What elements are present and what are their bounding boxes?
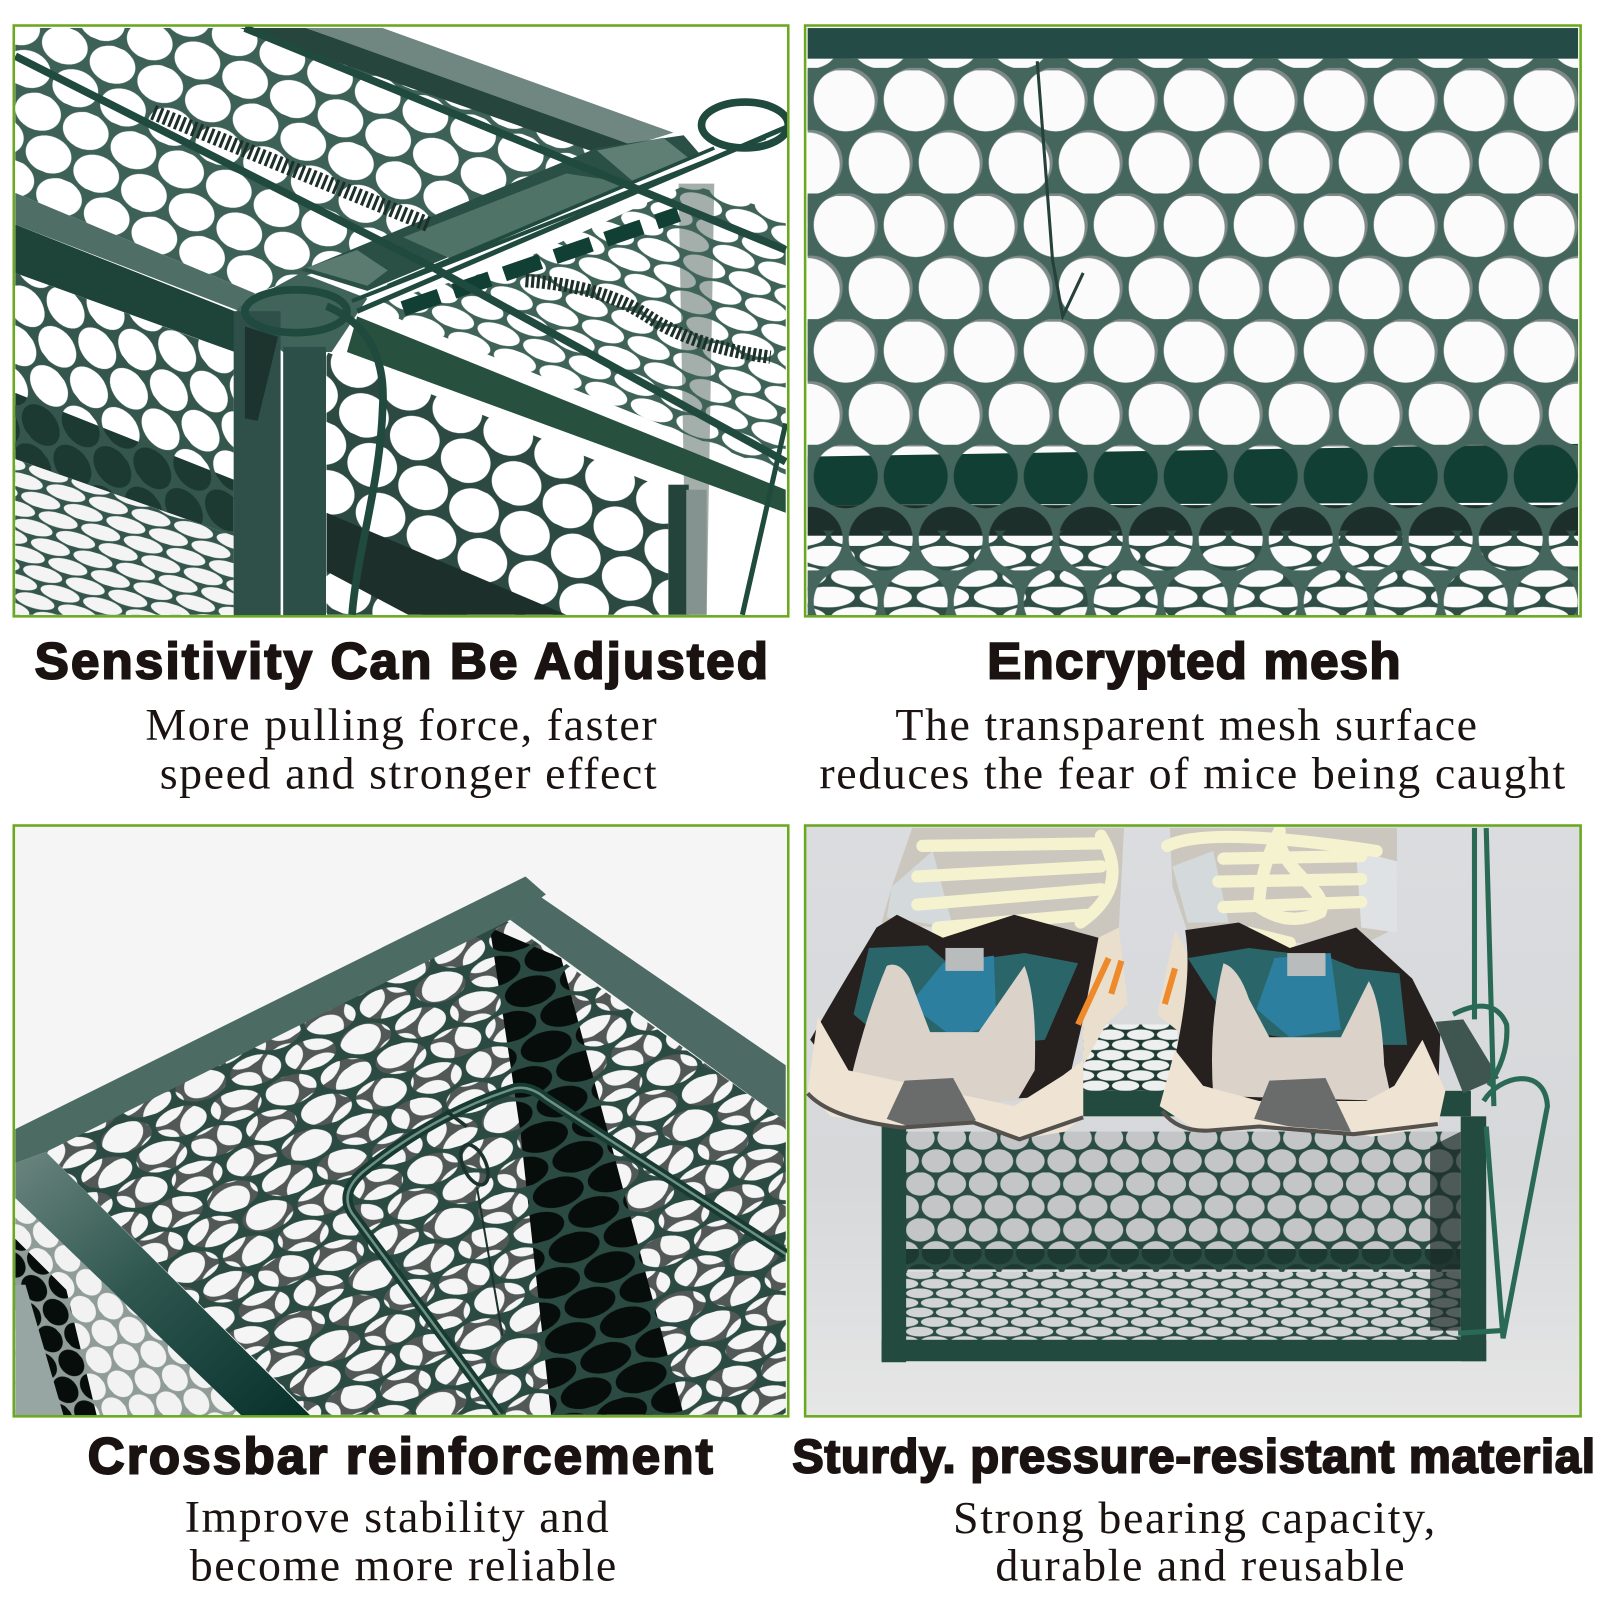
front left beam side bbox=[15, 224, 235, 352]
right front beam bbox=[347, 316, 786, 513]
description: Strong bearing capacity, bbox=[953, 1492, 1435, 1543]
side mesh base bbox=[15, 1198, 242, 1416]
front mesh bbox=[808, 59, 1578, 617]
door wire loop bbox=[347, 1088, 786, 1415]
right rear post bbox=[668, 485, 689, 615]
rear bar bbox=[905, 1249, 1461, 1269]
description bbox=[185, 1491, 616, 1591]
floor mesh bbox=[905, 1272, 1461, 1341]
description: reduces the fear of mice being caught bbox=[819, 747, 1566, 798]
heading: Sturdy. pressure-resistant material bbox=[792, 1430, 1595, 1482]
heading: Crossbar reinforcement bbox=[88, 1427, 713, 1484]
dark holes under crossbar bbox=[403, 214, 679, 309]
description: More pulling force, faster bbox=[145, 699, 657, 750]
right side mesh bbox=[327, 352, 668, 615]
springs bbox=[153, 112, 770, 357]
right shoe bbox=[1157, 828, 1445, 1137]
rear bar behind mesh bbox=[808, 444, 1578, 505]
heading: Encrypted mesh bbox=[987, 633, 1401, 690]
description bbox=[953, 1492, 1435, 1591]
side mesh and leg bbox=[15, 1198, 242, 1416]
rear mesh layer bbox=[46, 920, 786, 1415]
far left beam bbox=[15, 877, 546, 1163]
top mesh bbox=[15, 28, 638, 293]
description: Improve stability and bbox=[185, 1491, 609, 1542]
left shoe bbox=[808, 828, 1128, 1139]
photo: trap top corner with wires and springs bbox=[14, 26, 788, 617]
description bbox=[819, 699, 1566, 798]
dark lower panel on left bbox=[15, 393, 234, 536]
photo: shoes standing on trap bbox=[805, 826, 1581, 1416]
front left beam top bbox=[15, 193, 255, 311]
latch ring bbox=[446, 1111, 503, 1336]
left side mesh bbox=[15, 273, 234, 615]
description bbox=[145, 699, 657, 798]
dark panel holes on left bbox=[15, 393, 234, 536]
floor mesh bbox=[808, 531, 1578, 617]
back beam underside bbox=[240, 28, 633, 153]
galvanized rear post bbox=[679, 184, 714, 615]
corner junction bbox=[235, 273, 367, 352]
wires and rings bbox=[15, 28, 788, 615]
photo frame bbox=[805, 26, 1581, 616]
top bar bbox=[808, 28, 1578, 59]
floor mesh on left bbox=[15, 459, 234, 615]
panel: sensitivity can be adjusted bbox=[14, 26, 788, 798]
trap bbox=[882, 1019, 1499, 1362]
right end dark interior bbox=[1430, 1132, 1461, 1331]
dark rear floor edge bbox=[808, 505, 1578, 536]
photo: trap corner from above bbox=[14, 826, 788, 1416]
frame bbox=[882, 1091, 1486, 1362]
back beam top bbox=[306, 28, 673, 145]
description: durable and reusable bbox=[995, 1540, 1405, 1591]
top mesh bbox=[1083, 1024, 1178, 1091]
near beam bbox=[15, 1152, 311, 1416]
photo frame bbox=[14, 26, 788, 616]
panel: encrypted mesh bbox=[805, 26, 1581, 798]
dark interior stripe bbox=[490, 928, 684, 1415]
panel: sturdy pressure-resistant material bbox=[792, 826, 1595, 1591]
panel: crossbar reinforcement bbox=[14, 826, 788, 1591]
side mesh dark interior bbox=[15, 1239, 97, 1416]
crossbar bbox=[301, 135, 699, 291]
photo frame bbox=[805, 826, 1581, 1416]
door mesh bbox=[367, 184, 786, 474]
corner post bbox=[234, 311, 326, 617]
dark lower rail on right bbox=[327, 513, 566, 615]
description: become more reliable bbox=[190, 1540, 616, 1591]
far right beam bbox=[510, 897, 786, 1121]
trigger wire bbox=[1037, 61, 1083, 316]
door end mechanism bbox=[1435, 1019, 1499, 1093]
rear mesh layer bbox=[808, 59, 1578, 446]
photo: close-up of mesh bbox=[805, 26, 1581, 617]
side mesh bbox=[905, 1132, 1461, 1272]
front mesh bbox=[46, 920, 786, 1415]
description: The transparent mesh surface bbox=[895, 699, 1477, 750]
photo frame bbox=[14, 826, 788, 1416]
heading: Sensitivity Can Be Adjusted bbox=[35, 633, 768, 690]
backdrop inside trap bbox=[905, 1132, 1461, 1249]
door wires and handle bbox=[1453, 828, 1547, 1338]
description: speed and stronger effect bbox=[160, 747, 657, 798]
